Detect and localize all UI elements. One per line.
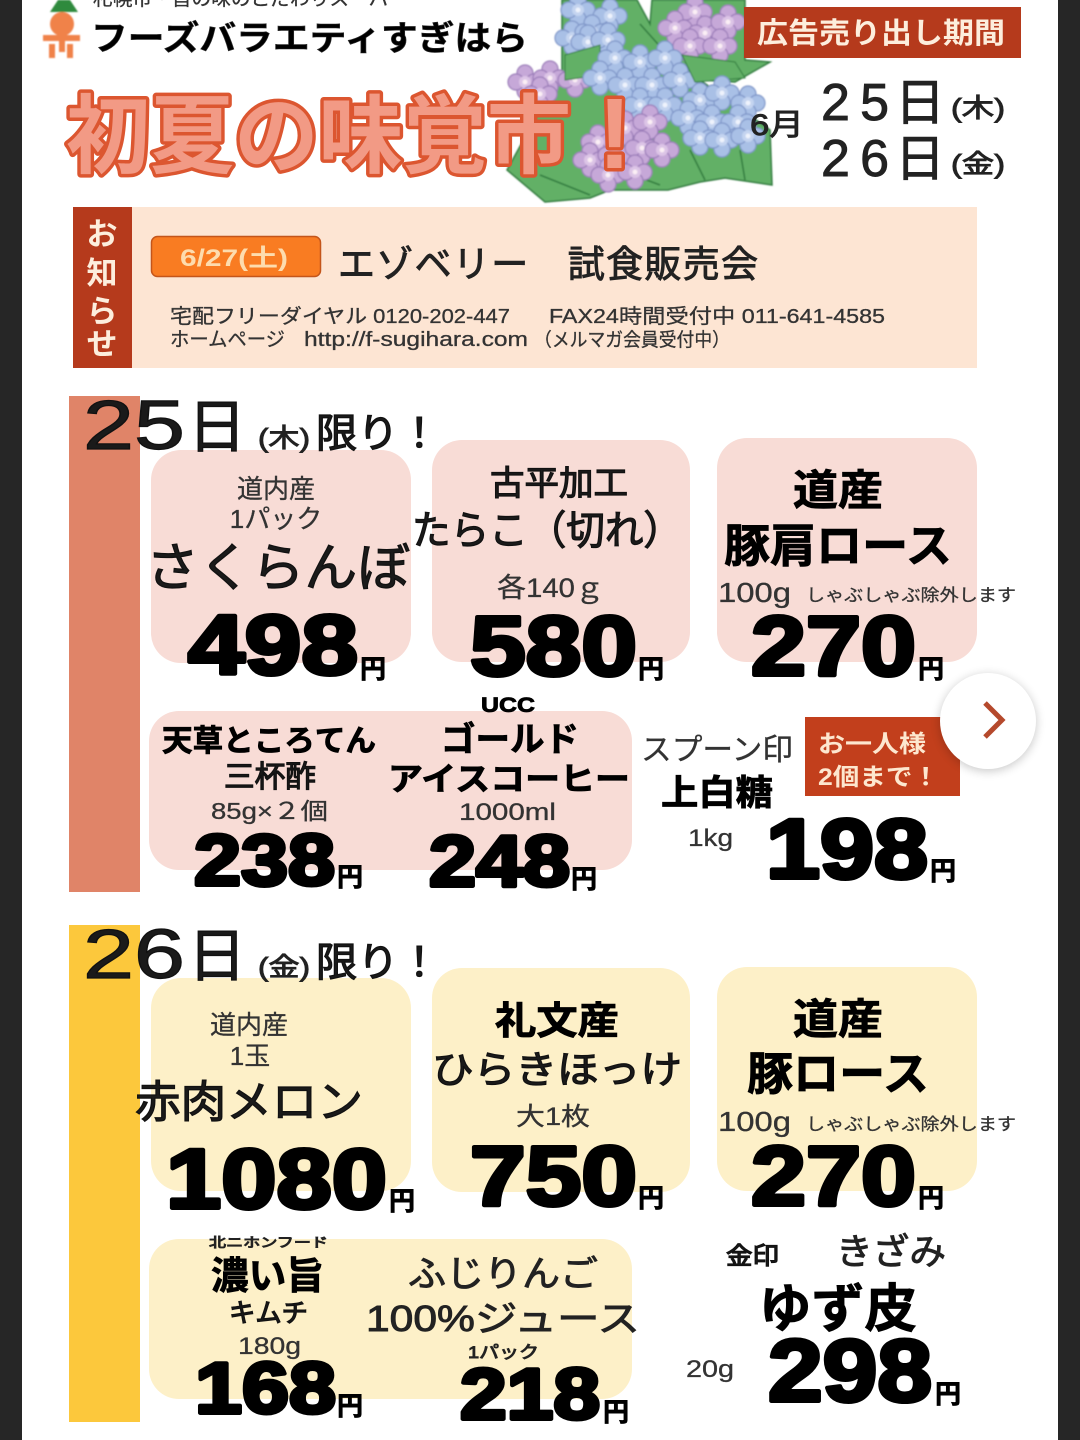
panel: notice [73,207,977,368]
product: melon: 円 [389,1186,415,1216]
product: apple juice: 円 [603,1397,629,1427]
product: apple juice: ふじりんご [408,1253,598,1294]
panel: product 26-2 background [432,968,690,1192]
heading: 26th only: (金) [258,952,310,982]
sale dates: 25 [821,74,889,132]
main title: ! [598,78,631,190]
icon: next arrow button [940,673,1036,771]
product: iced coffee: 1000ml [459,799,556,826]
product: sugar: 上白糖 [661,774,773,813]
heading: 26th only: 日 [188,924,246,989]
store name: フーズバラエティすぎはら [91,19,528,58]
callout: limit two per person: お一人様 [818,731,926,758]
product: melon: 赤肉メロン [135,1078,363,1127]
date badge [152,236,320,276]
product: hokke fish: 円 [638,1183,664,1213]
product: cod roe: 各140ｇ [497,573,604,603]
sale period badge: 広告売り出し期間 [757,17,1005,50]
product: kimchi: 濃い旨 [211,1256,324,1298]
contact details: ホームページ [170,329,285,351]
product: pork shoulder loin [718,467,1016,693]
sale dates: 6月 [750,109,804,142]
product: cod roe: たらこ（切れ） [412,509,682,553]
panel: product 26-3 background [717,967,977,1191]
product: cherries: さくらんぼ [146,540,410,598]
panel: product 25-1 background [151,450,411,663]
product: kimchi: 円 [337,1391,363,1421]
sale dates: (木) [951,93,1005,123]
product: tokoroten: 85g×２個 [211,798,328,824]
sale dates: 26 [821,130,889,188]
notice vertical label: お [86,217,118,252]
product: sugar: スプーン印 [641,734,793,767]
product: tokoroten: 円 [337,862,363,892]
product: iced coffee: UCC [481,694,535,717]
callout: limit two per person [805,717,960,796]
product: pork loin: 100g [718,1106,791,1137]
product: cherries: 498 [188,598,358,692]
product: tokoroten [162,725,376,901]
product: yuzu peel: 298 [768,1321,932,1420]
product: kimchi [195,1235,363,1429]
product: cherries [146,474,410,692]
product: kimchi: 180g [238,1333,301,1360]
product: iced coffee: 248 [429,822,570,902]
product: yuzu peel: ゆず皮 [759,1281,917,1339]
product: pork shoulder loin: 豚肩ロース [724,520,952,572]
product: sugar: 1kg [688,825,733,852]
heading: 25th only: 25 [83,386,185,464]
product: melon: 道内産 [210,1010,288,1040]
panel: product 25-3 background [717,438,977,662]
product: pork loin: 270 [751,1129,916,1223]
product: cod roe [412,465,682,693]
product: hokke fish: 礼文産 [495,1001,619,1043]
panel: product 25-4 background [149,711,632,870]
product: pork loin: しゃぶしゃぶ除外します [806,1115,1016,1134]
product: tokoroten: 天草ところてん [162,725,376,758]
product: kimchi: 168 [195,1349,336,1429]
product: yuzu peel: 20g [686,1356,734,1383]
product: melon [135,1010,415,1226]
right screen edge [1058,0,1080,1440]
product: iced coffee: ゴールド [441,720,579,759]
panel: product 25-2 background [432,440,690,662]
heading: 25th only: 限り！ [316,412,440,456]
product: pork shoulder loin: しゃぶしゃぶ除外します [806,586,1016,605]
product: apple juice: 100%ジュース [366,1298,640,1339]
notice vertical label: 知 [86,256,118,291]
product: cod roe: 円 [638,654,664,684]
sale dates: 日 [895,75,945,131]
contact details: （メルマガ会員受付中） [534,329,730,351]
product: cherries: 1パック [230,504,322,534]
heading: 25th only [83,386,440,464]
product: apple juice: 1パック [468,1343,539,1362]
date badge: 6/27(土) [180,245,288,272]
product: pork loin: 円 [918,1183,944,1213]
product: cod roe: 古平加工 [490,465,628,503]
product: hokke fish: 750 [470,1129,637,1223]
contact details: FAX24時間受付中 011-641-4585 [549,305,885,328]
callout: limit two per person: 2個まで！ [818,764,939,791]
product: yuzu peel: 円 [935,1379,961,1409]
event name: エゾベリー 試食販売会 [338,244,758,285]
product: hokke fish: ひらきほっけ [432,1050,682,1092]
product: apple juice [366,1253,640,1435]
logo mascot [43,0,80,58]
product: tokoroten: 三杯酢 [224,761,316,794]
contact details: 宅配フリーダイヤル 0120-202-447 [170,305,510,328]
product: iced coffee: アイスコーヒー [388,761,630,797]
notice vertical label [86,217,118,362]
section bar: 26th [69,925,140,1422]
product: pork loin: 道産 [793,996,883,1043]
product: yuzu peel [686,1231,961,1420]
panel: product 26-1 background [151,978,411,1191]
product: pork shoulder loin: 道産 [793,467,883,514]
heading: 26th only [83,915,440,993]
product: kimchi: キムチ [229,1298,308,1328]
heading: 25th only: (木) [258,423,310,453]
section bar: 25th [69,396,140,892]
product: pork loin: 豚ロース [747,1048,929,1100]
product: cod roe: 580 [470,599,637,693]
heading: 25th only: 日 [188,395,246,460]
notice vertical label: せ [86,327,118,362]
notice vertical label: ら [86,294,118,329]
icon: hydrangea illustration [507,0,772,202]
product: tokoroten: 238 [194,821,335,901]
panel: product 26-4 background [149,1239,632,1399]
product: kimchi: 北ニホンフード [209,1235,328,1250]
contact details [170,305,885,351]
product: iced coffee: 円 [571,864,597,894]
sale period badge [744,7,1021,58]
left screen edge [0,0,22,1440]
sale dates: 日 [895,131,945,187]
product: pork shoulder loin: 円 [918,654,944,684]
product: sugar: 198 [766,802,928,896]
product: iced coffee [388,694,630,902]
heading: 26th only: 限り！ [316,941,440,985]
product: hokke fish [432,1001,682,1223]
product: sugar [641,734,956,896]
product: apple juice: 218 [460,1355,600,1435]
contact details: http://f-sugihara.com [304,329,528,351]
heading: 26th only: 26 [83,915,185,993]
product: melon: 1080 [166,1132,387,1226]
sale dates [750,74,1005,188]
product: cherries: 円 [360,654,386,684]
sale dates: (金) [951,149,1005,179]
product: yuzu peel: 金印 [726,1243,779,1270]
product: melon: 1玉 [230,1041,270,1071]
product: hokke fish: 大1枚 [516,1103,590,1131]
product: cherries: 道内産 [237,474,315,504]
product: sugar: 円 [930,856,956,886]
main title: 初夏の味覚市 [66,89,571,185]
product: yuzu peel: きざみ [836,1231,946,1272]
product: pork loin [718,996,1016,1223]
product: pork shoulder loin: 100g [718,577,791,608]
product: pork shoulder loin: 270 [751,599,916,693]
